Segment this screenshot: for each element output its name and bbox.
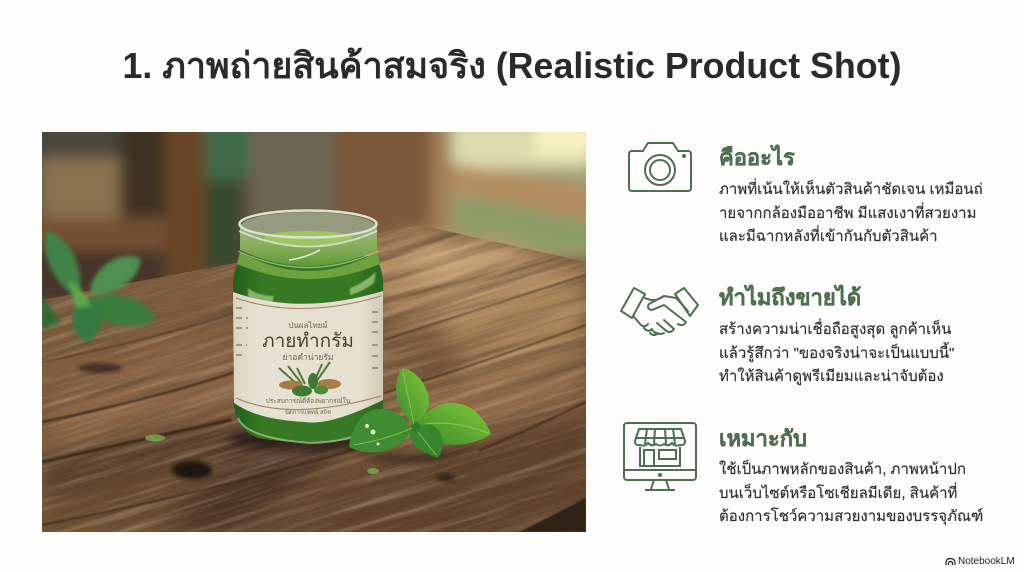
NotebookLM badge: NotebookLM	[958, 556, 1015, 567]
icon: camera	[628, 142, 692, 192]
text: why it sells	[719, 318, 954, 386]
text: suitable for: บนเว็บไซต์หรือโซเชียลมีเดีย, สินค้าที่	[719, 484, 957, 502]
text: what it is: ายจากกล้องมืออาชีพ มีแสงเงาที่สวยงาม	[719, 204, 976, 222]
text: suitable for: ต้องการโชว์ความสวยงามของบรรจุภัณฑ์	[719, 508, 983, 525]
title: 1. ภาพถ่ายสินค้าสมจริง (Realistic Product Shot)	[122, 46, 902, 86]
icon: online shop on monitor	[623, 422, 697, 491]
text: what it is	[719, 178, 983, 245]
text: suitable for	[719, 460, 983, 526]
text: why it sells: ทำให้สินค้าดูพรีเมียมและน่าจับต้อง	[719, 368, 944, 385]
text: what it is: และมีฉากหลังที่เข้ากันกับตัวสินค้า	[719, 228, 938, 245]
jar label	[233, 291, 383, 423]
text: why it sells: สร้างความน่าเชื่อถือสูงสุด ลูกค้าเห็น	[719, 321, 951, 338]
jar label: นัดการแพทย์ สถิต	[285, 408, 331, 416]
text: why it sells: แล้วรู้สึกว่า "ของจริงน่าจะเป็นแบบนี้"	[719, 344, 954, 362]
blurred room background	[42, 132, 586, 300]
heading: suitable for: เหมาะกับ	[719, 426, 807, 451]
text: what it is: ภาพที่เน้นให้เห็นตัวสินค้าชัดเจน เหมือนถ่	[719, 181, 983, 198]
heading: why it sells: ทำไมถึงขายได้	[719, 285, 861, 310]
jar base	[238, 418, 372, 443]
table top	[42, 225, 586, 532]
blurred mint sprig	[42, 230, 156, 342]
jar label: ย่าอคำน่ายรัม	[282, 352, 334, 362]
jar label: ปนผลไทยม์	[288, 320, 328, 330]
heading: what it is: คืออะไร	[719, 145, 795, 170]
text: suitable for: ใช้เป็นภาพหลักของสินค้า, ภาพหน้าปก	[719, 461, 966, 478]
jar	[228, 210, 396, 451]
fresh mint leaves with droplets	[145, 368, 491, 474]
jar label: ภายทำกรัม	[262, 331, 354, 352]
icon: NotebookLM logo	[945, 558, 956, 565]
product photo: jar on wooden table	[42, 132, 586, 532]
jar label: ประสบการณ์ดีต้องพยากรณ์ใน	[266, 397, 351, 405]
jar neck and glass rim	[238, 210, 378, 268]
icon: handshake	[620, 287, 699, 336]
